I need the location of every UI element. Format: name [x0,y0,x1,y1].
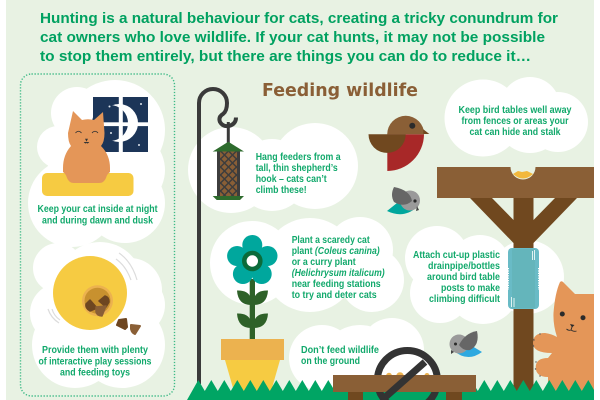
icon: small blue bird [450,331,482,357]
text: don't feed on ground: on the ground [301,356,360,367]
text: drainpipe: drainpipe/bottles [428,261,500,272]
icon: grass strip [187,380,594,400]
text: drainpipe: posts to make [441,283,500,294]
text: keep bird tables away [458,105,572,138]
text: shepherd's hook: climb these! [256,185,307,196]
text: scaredy cat plant [292,235,385,301]
icon: shepherd's hook pole [199,89,236,384]
text: drainpipe: around bird table [427,272,500,283]
intro heading: Hunting is a natural behaviour for cats, creating a tricky conundrum for [40,11,558,27]
text: shepherd's hook: hook – cats can’t [256,174,327,185]
text: drainpipe: climbing difficult [429,294,501,305]
text: drainpipe [413,250,501,305]
heading: feeding wildlife: Feeding wildlife [262,81,418,101]
icon: robin [368,116,429,171]
text: play sessions: of interactive play sessions [38,356,152,368]
cloud: keep cat inside [28,80,165,247]
text: shepherd's hook: Hang feeders from a [256,152,341,163]
icon: small teal bird [387,187,420,214]
text: shepherd's hook [256,152,341,196]
text: scaredy cat plant: Plant a scaredy cat [292,235,370,246]
text: keep bird tables away: from fences or areas your [462,116,569,127]
icon: sitting cat [63,111,110,183]
intro heading: to stop them entirely, but there are things you can do to reduce it… [40,49,531,65]
icon: plastic pipe guard [508,248,539,309]
text: keep bird tables away: Keep bird tables well away [458,105,572,116]
cloud: don't feed on ground [289,318,439,400]
text: scaredy cat plant: or a curry plant [292,257,356,268]
icon: yellow cushion [42,173,134,196]
text: keep your cat inside: and during dawn and dusk [42,216,153,226]
intro heading [40,11,558,65]
text: keep bird tables away: cat can hide and stalk [470,127,561,138]
text: scaredy cat plant: near feeding stations [292,279,381,290]
icon: bird table with post [437,167,594,395]
icon: cat peeking at post [533,281,594,400]
icon: yellow feeding toy [48,253,140,334]
cloud: keep bird tables away [444,77,588,156]
text: drainpipe: Attach cut-up plastic [413,250,500,261]
text: scaredy cat plant: plant (Coleus canina) [292,246,380,257]
cloud: shepherd's hook [188,123,358,213]
text: play sessions: Provide them with plenty [42,345,148,356]
text: play sessions: and feeding toys [60,368,130,378]
icon: bird feeder [213,122,244,200]
icon: no-feeding table on ground [333,350,476,400]
panel: indoor cat tips [20,74,174,396]
cloud: scaredy cat plant [210,217,404,312]
text: don't feed on ground [301,345,379,367]
cloud: drainpipe [405,226,564,324]
text: keep your cat inside: Keep your cat inside at night [38,204,158,215]
cloud: play sessions [30,242,165,388]
text: scaredy cat plant: (Helichrysum italicum) [292,268,385,279]
text: play sessions [38,345,152,378]
icon: night window with moon [92,97,148,152]
text: keep your cat inside [38,204,158,226]
intro heading: cat owners who love wildlife. If your cat hunts, it may not be possible [40,30,545,46]
text: scaredy cat plant: to try and deter cats [292,290,377,301]
text: don't feed on ground: Don’t feed wildlife [301,345,379,356]
icon: potted flower [221,235,284,395]
text: shepherd's hook: tall, thin shepherd’s [256,163,338,174]
